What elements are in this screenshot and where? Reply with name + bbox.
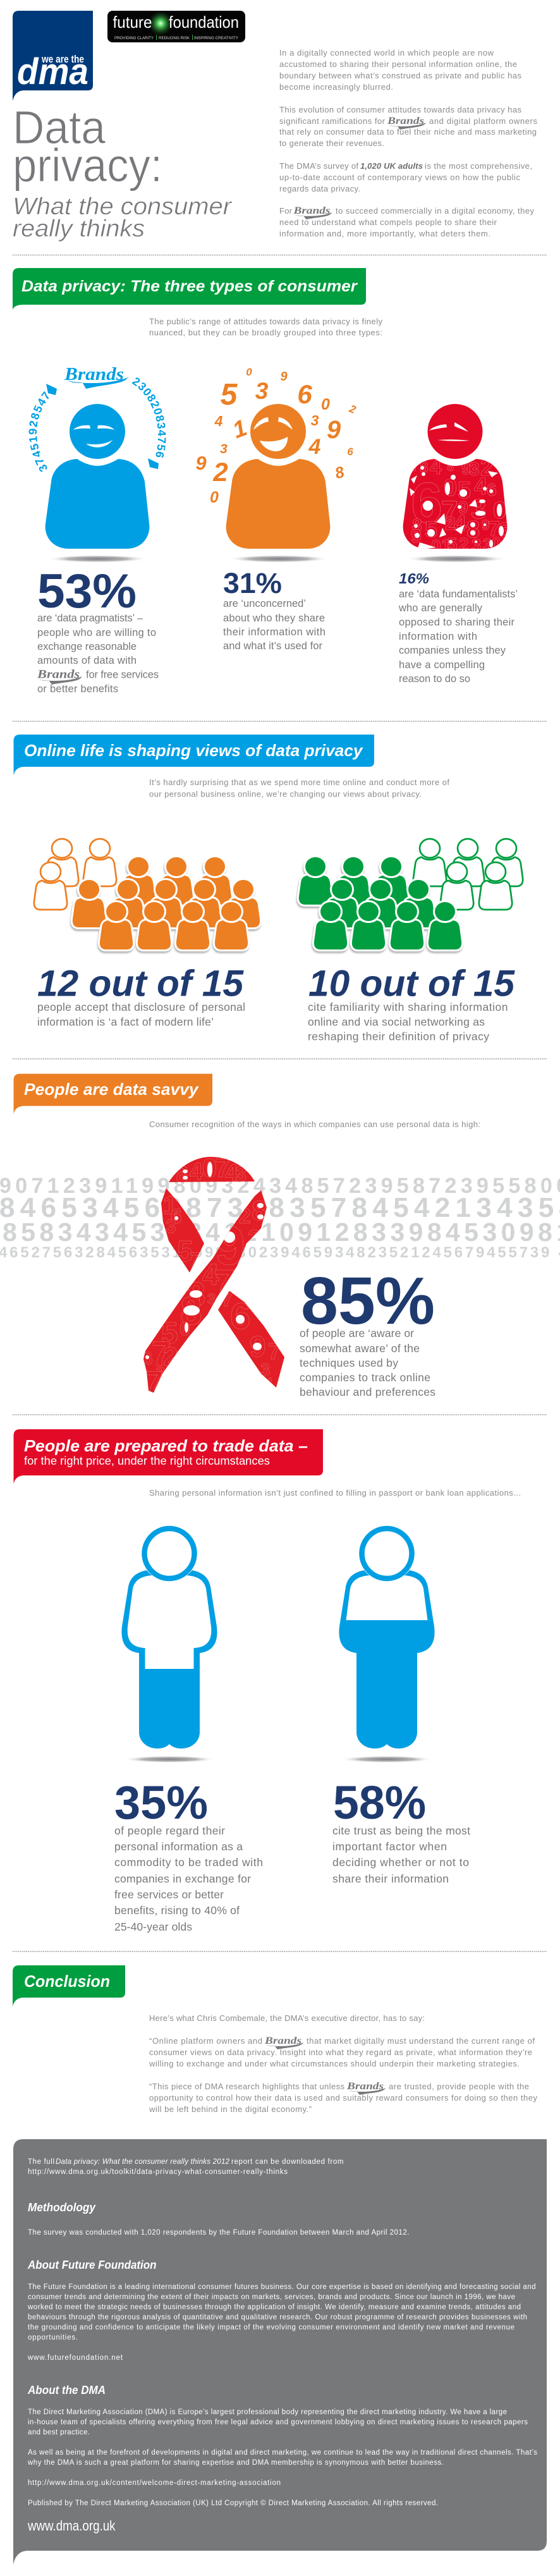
stat: 58%: share their information — [332, 1872, 449, 1885]
title — [13, 101, 232, 242]
heading banner — [14, 1429, 323, 1484]
quote text: Brands — [264, 2036, 301, 2046]
icon: ribbon made of numbers: 7 — [152, 1334, 171, 1373]
quote text: Brands — [346, 2081, 384, 2092]
title: Data — [13, 101, 106, 154]
stat: 58%: deciding whether or not to — [332, 1856, 469, 1869]
panel: people are data savvy — [0, 1074, 560, 1400]
icon: ribbon made of numbers: 8 — [252, 1195, 267, 1226]
stat: 53%: or better benefits — [37, 683, 118, 695]
stat: 35%: free services or better — [114, 1888, 224, 1901]
stat: 31%: about who they share — [223, 613, 325, 624]
intro line: nuanced, but they can be broadly grouped into three types: — [149, 327, 382, 337]
icon: red person made of numbers: 0 — [431, 536, 441, 556]
quote text: “This piece of DMA research highlights that unless — [149, 2082, 345, 2091]
icon: red person made of numbers: 3 — [471, 494, 486, 525]
stat: 35%: 35% — [114, 1776, 208, 1829]
methodology: Methodology — [28, 2201, 96, 2214]
icon: ribbon made of numbers: 0 — [180, 1319, 190, 1340]
icon: ribbon made of numbers: 7 — [145, 1365, 163, 1400]
stat: 85%: 85% — [301, 1264, 435, 1338]
quote text: Here’s what Chris Combemale, the DMA’s executive director, has to say: — [149, 2013, 425, 2023]
icon: ribbon made of numbers: 3 — [156, 1364, 164, 1381]
about the dma — [27, 2384, 537, 2507]
icon: orange person with numbers: 4 — [308, 435, 321, 459]
intro text: that rely on consumer data to fuel their niche and mass marketing — [279, 127, 537, 137]
about the dma: in-house team of specialists offering everything from free legal advice and government lobbying on direct marketing issues to research papers — [28, 2419, 528, 2426]
icon: red person made of numbers: 9 — [461, 459, 470, 478]
stat: 58% — [332, 1776, 470, 1885]
stat: 31%: 31% — [223, 567, 282, 599]
stat: 53% — [37, 565, 159, 695]
icon: orange crowd, 12 of 15 — [34, 839, 260, 949]
stat: 35% — [114, 1776, 263, 1933]
intro text: to generate their revenues. — [279, 138, 384, 148]
logo: we are the dma: dma — [17, 51, 88, 92]
about future foundation: opportunities. — [28, 2334, 78, 2341]
about future foundation: behaviours through the rigorous analysis of quantitative and qualitative research. Our robust programme of research provides businesses with — [28, 2314, 527, 2321]
heading banner: Conclusion — [24, 1972, 110, 1991]
icon: ribbon made of numbers: 3 — [207, 1291, 216, 1308]
icon: red person made of numbers: 8 — [420, 459, 428, 476]
logo: future foundation: INSPIRING CREATIVITY — [194, 36, 239, 40]
logo: we are the dma — [13, 11, 93, 101]
icon: ribbon made of numbers: 3 — [248, 1226, 261, 1252]
stat: 53%: exchange reasonable — [37, 641, 137, 652]
icon: red person made of numbers — [398, 404, 512, 563]
stat: 35%: 25-40-year olds — [114, 1920, 192, 1933]
download note — [28, 2158, 344, 2176]
about the dma: and best practice. — [28, 2429, 90, 2436]
panel: conclusion — [13, 1965, 537, 2114]
stat: 16%: opposed to sharing their — [399, 617, 514, 628]
icon: ribbon made of numbers: 5 — [161, 1317, 178, 1350]
icon: red person made of numbers: 3 — [472, 535, 482, 555]
icon: red person made of numbers: 9 — [458, 497, 468, 517]
stat: 85%: behaviour and preferences — [300, 1386, 435, 1398]
icon: ribbon made of numbers: 7 — [214, 1262, 235, 1306]
stat: 35%: commodity to be traded with — [114, 1856, 263, 1869]
intro text: become increasingly blurred. — [279, 82, 393, 92]
stat: 12 out of 15: information is ‘a fact of modern life’ — [37, 1015, 214, 1028]
icon: ribbon made of numbers: 3 — [260, 1360, 271, 1379]
intro text: The DMA’s survey of — [279, 161, 358, 171]
icon: ribbon made of numbers: 2 — [239, 1204, 251, 1228]
icon: red person made of numbers: 0 — [493, 497, 506, 524]
icon: ribbon made of numbers: 2 — [163, 1341, 178, 1371]
icon: ribbon made of numbers: 7 — [215, 1153, 229, 1183]
icon: blue person with brands and numbers: Brands — [64, 364, 124, 384]
icon: person filled 58% — [339, 1529, 435, 1762]
quote text: consumer views on data privacy. Insight into what they regard as private, what information they’re — [149, 2048, 532, 2057]
title: privacy: — [13, 139, 162, 192]
heading banner: Online life is shaping views of data privacy — [24, 741, 363, 760]
stat: 85% — [300, 1264, 435, 1398]
heading banner: Data privacy: The three types of consumer — [21, 278, 358, 295]
heading banner — [14, 735, 374, 776]
icon: ribbon made of numbers: 0 — [202, 1153, 217, 1183]
quote text — [149, 2013, 537, 2114]
icon: orange person with numbers: 3 — [311, 412, 319, 429]
icon: ribbon made of numbers: 8 — [176, 1161, 188, 1187]
icon: ribbon made of numbers: 8 — [180, 1290, 202, 1333]
heading banner: People are prepared to trade data – — [24, 1436, 308, 1455]
title: What the consumer — [13, 193, 232, 220]
icon: orange person with numbers: 3 — [220, 442, 228, 456]
icon: red person made of numbers: 5 — [447, 534, 458, 554]
stat: 53%: amounts of data with — [37, 655, 137, 666]
download note: report can be downloaded from — [231, 2158, 344, 2166]
icon: green crowd, 10 of 15 — [299, 839, 523, 949]
background number rows: 8465345628736835784542134354 — [0, 1192, 560, 1223]
quote text: opportunity to control how their data is used and suitably reward consumers for doing so then they — [149, 2093, 537, 2103]
logo: we are the dma: we are the — [41, 53, 84, 65]
icon: red person made of numbers: 2 — [480, 455, 493, 480]
website: www.dma.org.uk — [27, 2518, 116, 2534]
intro line: Sharing personal information isn’t just confined to filling in passport or bank loan applications... — [149, 1488, 521, 1498]
icon: orange person with numbers: 9 — [280, 370, 288, 384]
stat: 53%: Brands — [37, 668, 80, 681]
icon: orange person with numbers: 2 — [347, 403, 358, 416]
about future foundation: worked to meet the strategic needs of businesses through the application of insight. We identify, measure and examine trends, attitudes and — [27, 2304, 521, 2311]
stat: 85%: techniques used by — [300, 1357, 398, 1369]
icon: orange person with numbers: 0 — [246, 366, 252, 378]
intro line: It’s hardly surprising that as we spend more time online and conduct more of — [149, 778, 449, 787]
icon: orange person with numbers: 6 — [347, 446, 353, 458]
stat: 31%: are ‘unconcerned’ — [223, 598, 306, 609]
logo: future foundation: REDUCING RISK — [159, 36, 190, 40]
icon: red person made of numbers: 5 — [425, 516, 437, 542]
icon: red person made of numbers: 1 — [441, 535, 451, 555]
icon: ribbon made of numbers: 9 — [215, 1216, 245, 1276]
background number rows: 907123911998093243485723958723955800 — [0, 1174, 560, 1198]
logo: future foundation: foundation — [169, 13, 239, 32]
intro text: significant ramifications for — [279, 116, 386, 126]
stat: 35%: personal information as a — [114, 1840, 243, 1853]
intro line: The public’s range of attitudes towards data privacy is finely — [149, 317, 383, 326]
stat: 31%: their information with — [223, 626, 326, 638]
intro text: Brands — [293, 205, 330, 216]
intro line: our personal business online, we’re changing our views about privacy. — [149, 789, 422, 799]
about the dma: As well as being at the forefront of developments in digital and direct marketing, we continue to lead the way in traditional direct channels. That’s — [28, 2449, 537, 2457]
icon: ribbon made of numbers: 6 — [143, 1348, 153, 1368]
download note: The full — [28, 2158, 54, 2166]
stat: 35%: of people regard their — [114, 1824, 225, 1837]
stat: 31% — [223, 567, 326, 652]
stat: 16%: 16% — [399, 570, 429, 587]
icon: ribbon made of numbers: 6 — [171, 1205, 182, 1228]
panel: prepared to trade data — [14, 1429, 521, 1933]
intro text: is the most comprehensive, — [425, 161, 532, 171]
intro text: 1,020 UK adults — [360, 161, 423, 171]
icon: ribbon made of numbers: 7 — [190, 1248, 202, 1273]
icon: ribbon made of numbers: 4 — [190, 1159, 203, 1185]
background number rows: 465275632845635312099130239465934823521245679455739 4 — [0, 1244, 560, 1261]
icon: red person made of numbers: 7 — [411, 458, 419, 475]
stat: 53%: are ‘data pragmatists’ – — [37, 613, 143, 624]
stat: 16% — [398, 570, 518, 685]
intro text: For — [279, 206, 293, 216]
about the dma: The Direct Marketing Association (DMA) is Europe’s largest professional body representing the direct marketing industry. We have a large — [28, 2408, 507, 2416]
icon: blue person with brands and numbers — [28, 364, 166, 562]
title: really thinks — [13, 216, 145, 242]
intro text: need to understand what compels people to share their — [279, 217, 497, 227]
quote text: will be left behind in the digital economy.” — [149, 2104, 312, 2114]
icon: ribbon made of numbers: 4 — [202, 1259, 219, 1292]
methodology: The survey was conducted with 1,020 respondents by the Future Foundation between March and April 2012. — [28, 2229, 409, 2237]
background number rows: 8583434531841210912833984530981 — [3, 1218, 560, 1247]
about the dma: http://www.dma.org.uk/content/welcome-direct-marketing-association — [28, 2479, 281, 2487]
about the dma: why the DMA is such a great platform for sharing expertise and DMA membership is synonymous with better business. — [27, 2459, 444, 2467]
icon: red person made of numbers: 8 — [447, 460, 454, 474]
icon: ribbon made of numbers: 7 — [221, 1287, 233, 1311]
panel: three types of consumer — [13, 268, 518, 695]
icon: ribbon made of numbers: 7 — [268, 1338, 281, 1364]
stat: 58%: important factor when — [332, 1840, 447, 1853]
heading banner: for the right price, under the right circumstances — [24, 1455, 270, 1467]
intro line: Consumer recognition of the ways in which companies can use personal data is high: — [149, 1120, 480, 1129]
stat: 12 out of 15 — [37, 963, 245, 1028]
heading banner — [13, 268, 366, 310]
panel: footer — [13, 2139, 547, 2565]
icon: orange person with numbers: 9 — [327, 416, 341, 444]
stat: 16%: reason to do so — [399, 673, 470, 685]
intro text: In a digitally connected world in which people are now — [279, 48, 494, 58]
icon: ribbon made of numbers: 4 — [225, 1160, 238, 1187]
icon: red person made of numbers: 7 — [488, 517, 500, 541]
icon: ribbon made of numbers: 3 — [235, 1163, 247, 1185]
intro text: to succeed commercially in a digital economy, they — [336, 206, 535, 216]
icon: orange person with numbers: 0 — [321, 396, 330, 413]
icon: orange person with numbers: 3 — [255, 378, 269, 404]
icon: orange person with numbers: 9 — [195, 452, 207, 474]
icon: red person made of numbers: 4 — [474, 473, 487, 500]
methodology — [28, 2201, 409, 2237]
logo: future foundation: future — [113, 13, 152, 32]
stat: 16%: information with — [399, 631, 477, 642]
stat: 58%: 58% — [333, 1776, 426, 1829]
stat: 85%: of people are ‘aware or — [300, 1327, 414, 1340]
heading banner — [14, 1074, 212, 1114]
stat: 31%: and what it’s used for — [223, 640, 322, 652]
icon: red person made of numbers: 2 — [445, 513, 456, 534]
background number rows — [0, 1174, 560, 1261]
intro text: Brands — [387, 116, 424, 126]
icon: ribbon made of numbers: 1 — [163, 1192, 177, 1219]
icon: ribbon made of numbers — [142, 1153, 286, 1400]
icon: ribbon made of numbers: 6 — [230, 1296, 250, 1337]
about future foundation: www.futurefoundation.net — [27, 2354, 123, 2362]
heading banner: People are data savvy — [24, 1080, 199, 1099]
intro text: accustomed to sharing their personal information online, the — [279, 59, 517, 69]
icon: red person made of numbers: 2 — [459, 534, 469, 554]
intro text: This evolution of consumer attitudes towards data privacy has — [279, 105, 522, 114]
icon: ribbon made of numbers: 4 — [264, 1375, 273, 1392]
about future foundation: the grounding and confidence to anticipate the likely impact of the evolving consumer environment and identify new market and revenue — [28, 2324, 514, 2331]
about future foundation — [27, 2259, 536, 2362]
icon: ribbon made of numbers: 5 — [177, 1235, 193, 1267]
download note: http://www.dma.org.uk/toolkit/data-privacy-what-consumer-really-thinks — [28, 2168, 288, 2176]
stat: 10 out of 15: reshaping their definition of privacy — [308, 1030, 489, 1043]
quote text: “Online platform owners and — [149, 2036, 262, 2046]
icon: orange person with numbers: 4 — [214, 413, 223, 429]
about future foundation: The Future Foundation is a leading international consumer futures business. Our core expertise is based on identifying and forecasting social and — [28, 2283, 536, 2291]
quote text: willing to exchange and under what circumstances should underpin their marketing strategies. — [149, 2059, 520, 2068]
icon: red person made of numbers: 0 — [444, 475, 457, 501]
stat: 16%: companies unless they — [399, 645, 506, 656]
logo: future foundation: PROVIDING CLARITY — [114, 36, 154, 40]
stat: 10 out of 15: 10 out of 15 — [308, 963, 515, 1004]
stat: 16%: are ‘data fundamentalists’ — [399, 589, 518, 600]
stat: 16%: have a compelling — [399, 659, 485, 671]
intro text: information and, more importantly, what deters them. — [279, 229, 490, 238]
stat: 85%: companies to track online — [300, 1371, 430, 1384]
quote text: are trusted, provide people with the — [389, 2082, 529, 2091]
icon: red person made of numbers: 0 — [492, 534, 501, 552]
icon: orange person with numbers: 5 — [221, 378, 238, 412]
stat: 35%: benefits, rising to 40% of — [114, 1904, 240, 1917]
stat: 53%: for free services — [86, 669, 159, 680]
stat: 12 out of 15: people accept that disclosure of personal — [37, 1001, 245, 1013]
stat: 85%: somewhat aware’ of the — [300, 1342, 420, 1355]
icon: red person made of numbers: 8 — [466, 516, 480, 543]
heading banner — [13, 1965, 125, 2006]
panel: online life — [14, 735, 523, 1043]
icon: red person made of numbers: 5 — [458, 477, 471, 504]
about the dma: About the DMA — [27, 2384, 106, 2396]
stat: 53%: people who are willing to — [37, 627, 156, 638]
intro text: regards data privacy. — [279, 184, 360, 193]
icon: orange person with numbers: 0 — [210, 489, 219, 506]
about future foundation: About Future Foundation — [27, 2259, 157, 2271]
icon: red person made of numbers: 4 — [430, 455, 442, 479]
quote text: that market digitally must understand the current range of — [307, 2036, 535, 2046]
about future foundation: consumer trends and determining the extent of their impacts on markets, services, brands and products. Since our launch in 1996, we have — [28, 2293, 515, 2301]
stat: 53%: 53% — [37, 565, 137, 618]
icon: ribbon made of numbers: 8 — [187, 1276, 205, 1313]
icon: orange person with numbers: 8 — [333, 463, 346, 482]
icon: red person made of numbers: 3 — [483, 535, 492, 554]
intro line — [149, 317, 383, 337]
icon: red person made of numbers: 8 — [412, 515, 422, 535]
icon: ribbon made of numbers: 3 — [166, 1216, 176, 1237]
icon: red person made of numbers: 6 — [411, 472, 442, 535]
stat: 10 out of 15: online and via social networking as — [308, 1015, 485, 1028]
stat: 35%: companies in exchange for — [114, 1872, 251, 1885]
intro text: up-to-date account of contemporary views on how the public — [279, 173, 521, 182]
intro text — [279, 48, 537, 238]
stat: 16%: who are generally — [398, 602, 483, 614]
icon: orange person with numbers: 1 — [229, 415, 250, 443]
intro line — [149, 778, 449, 799]
intro text: boundary between what’s construed as private and public has — [279, 71, 522, 80]
icon: red person made of numbers: 4 — [454, 510, 466, 536]
icon: red person made of numbers: 7 — [441, 496, 458, 529]
stat: 12 out of 15: 12 out of 15 — [37, 963, 244, 1004]
logo: future foundation — [107, 11, 245, 42]
icon: orange person with numbers: 6 — [297, 379, 312, 409]
icon: red person made of numbers: 6 — [498, 518, 510, 542]
icon: red person made of numbers: 9 — [482, 517, 489, 533]
download note: Data privacy: What the consumer really thinks 2012 — [56, 2158, 230, 2166]
icon: red person made of numbers: 6 — [487, 480, 497, 499]
stat: 58%: cite trust as being the most — [332, 1824, 470, 1837]
about the dma: Published by The Direct Marketing Association (UK) Ltd Copyright © Direct Marketing Association. All rights reserved. — [28, 2500, 438, 2507]
icon: blue person with brands and numbers: 37451928547 — [28, 391, 49, 472]
icon: red person made of numbers: 9 — [411, 526, 422, 547]
stat: 10 out of 15: cite familiarity with sharing information — [308, 1001, 508, 1013]
icon: red person made of numbers: 3 — [469, 459, 480, 480]
icon: ribbon made of numbers: 9 — [250, 1330, 266, 1363]
icon: blue person with brands and numbers: 230820834756 — [131, 377, 166, 458]
icon: orange person with numbers: 2 — [212, 457, 228, 487]
icon: person filled 35% — [121, 1529, 217, 1762]
icon: orange person with numbers — [195, 366, 358, 563]
intro text: and digital platform owners — [429, 116, 537, 126]
stat: 10 out of 15 — [308, 963, 515, 1043]
